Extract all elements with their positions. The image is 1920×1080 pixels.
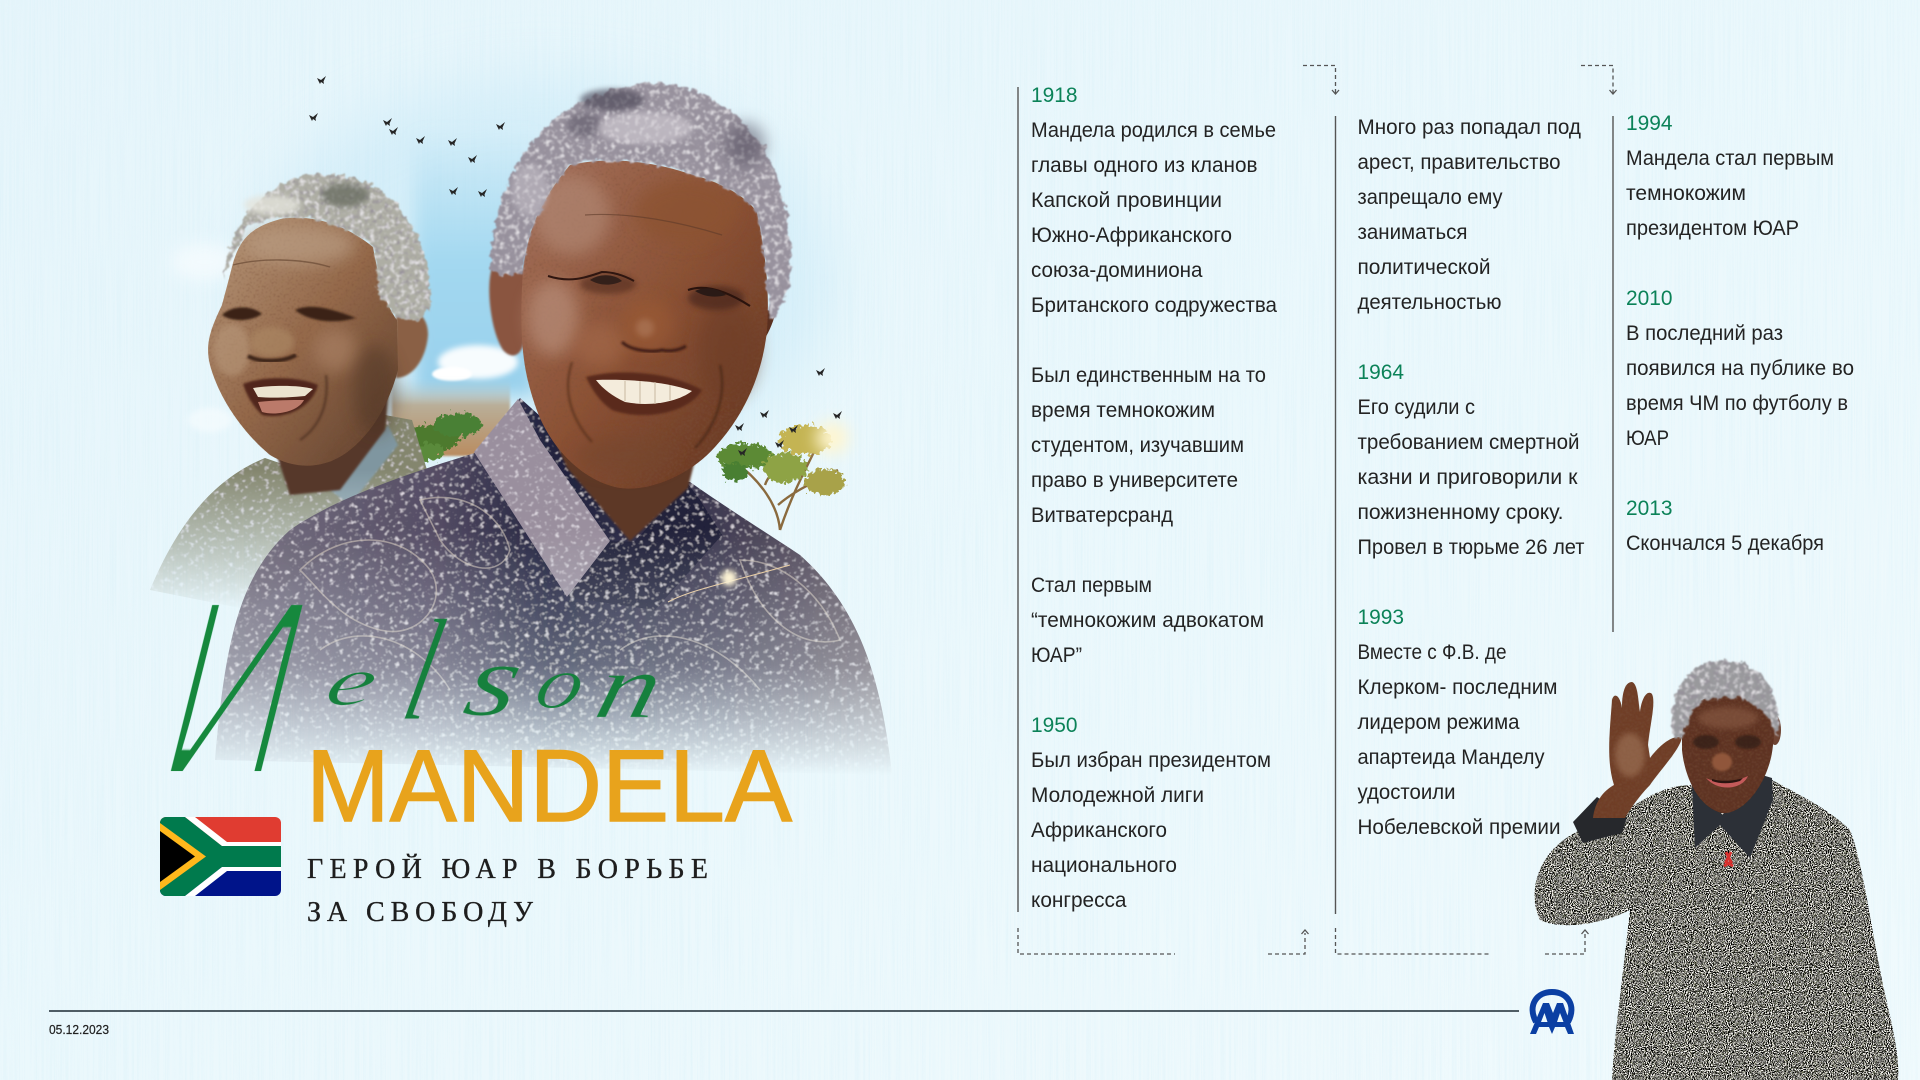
title: MANDELA: MANDELA (306, 729, 792, 843)
timeline column 1: Витватерсранд (1031, 504, 1173, 527)
sky behind portraits (171, 80, 830, 480)
timeline column 3: 2013 (1626, 497, 1672, 520)
timeline column 3: 1994 (1626, 112, 1673, 135)
subtitle: ГЕРОЙ ЮАР В БОРЬБЕ (307, 854, 708, 885)
birds flock (309, 76, 505, 197)
mouth (586, 372, 702, 415)
timeline column 1: Молодежной лиги (1031, 784, 1204, 807)
timeline column 2: арест, правительство (1358, 151, 1560, 174)
timeline column 1: Южно-Африканского (1031, 224, 1232, 247)
timeline column 1: национального (1031, 854, 1177, 877)
title: Nelson script: s (454, 622, 535, 738)
ear right (762, 310, 776, 342)
batik pattern (300, 497, 840, 690)
timeline column 2: казни и приговорили к (1358, 466, 1578, 489)
timeline column 2: Вместе с Ф.В. де (1358, 641, 1506, 664)
shirt (150, 415, 430, 610)
timeline column 2: Его судили с (1358, 396, 1475, 419)
portrait: Mandela foreground (215, 82, 892, 775)
timeline column 1: Был единственным на то (1031, 364, 1266, 387)
timeline column 1: союза-доминиона (1031, 259, 1203, 282)
title: Nelson script: l (391, 590, 457, 751)
hair (1672, 660, 1779, 738)
timeline column 2: удостоили (1358, 781, 1456, 804)
hair (490, 82, 791, 320)
timeline column 2: требованием смертной (1358, 431, 1580, 454)
eyes (548, 272, 750, 310)
portrait: waving Mandela (1535, 660, 1898, 1080)
face (521, 160, 768, 489)
ear (1769, 715, 1781, 745)
subtitle: ЗА СВОБОДУ (307, 897, 533, 928)
timeline column 2: Клерком- последним (1358, 676, 1558, 699)
title: Nelson script: o (528, 643, 594, 725)
arrow: column 2 to column 3 (1336, 66, 1616, 954)
sweater (1535, 780, 1898, 1080)
face (1682, 693, 1774, 813)
timeline column 1: Был избран президентом (1031, 749, 1271, 772)
timeline column 2: апартеида Манделу (1358, 746, 1545, 769)
timeline column 2: Много раз попадал под (1358, 116, 1581, 139)
date: 05.12.2023 (49, 1023, 109, 1037)
timeline column 1: 1950 (1031, 714, 1078, 737)
arrow: column 1 to column 2 (1018, 66, 1339, 954)
timeline column 3: время ЧМ по футболу в (1626, 392, 1848, 415)
face shading (527, 175, 758, 473)
timeline column 2: политической (1358, 256, 1490, 279)
hair (223, 174, 430, 320)
ribbon (1724, 852, 1733, 866)
timeline column 1: студентом, изучавшим (1031, 434, 1244, 457)
timeline column 3 (1626, 112, 1854, 555)
timeline column 3: президентом ЮАР (1626, 217, 1799, 240)
timeline column 2: Провел в тюрьме 26 лет (1358, 536, 1585, 559)
tree with sun glow and birds (717, 368, 848, 530)
column rules (1018, 87, 1613, 914)
timeline column 2: лидером режима (1358, 711, 1520, 734)
landscape with clouds and trees (392, 345, 518, 461)
face details (214, 225, 397, 440)
timeline column 1: Стал первым (1031, 574, 1152, 597)
timeline column 3: Мандела стал первым (1626, 147, 1834, 170)
neck (275, 375, 390, 495)
portrait: older Mandela behind (150, 174, 430, 610)
title: Nelson script: e (319, 644, 386, 721)
hair shading (244, 183, 369, 215)
ear left (489, 268, 525, 355)
timeline column 1: время темнокожим (1031, 399, 1215, 422)
timeline column 1: Мандела родился в семье (1031, 119, 1276, 142)
icon: AA logo (1530, 992, 1574, 1034)
subtitle (307, 854, 708, 928)
title: Nelson script: N (139, 550, 334, 826)
timeline column 2: 1964 (1358, 361, 1404, 384)
title: Nelson script (139, 550, 685, 826)
timeline column 3: ЮАР (1626, 427, 1669, 450)
timeline column 2: пожизненному сроку. (1358, 501, 1564, 524)
timeline column 1: главы одного из кланов (1031, 154, 1258, 177)
facial features (1693, 707, 1761, 788)
palm (1615, 733, 1645, 777)
timeline column 3: 2010 (1626, 287, 1672, 310)
timeline column 3: появился на публике во (1626, 357, 1854, 380)
timeline column 1: Британского содружества (1031, 294, 1277, 317)
timeline column 2 (1358, 116, 1585, 839)
timeline column 1: конгресса (1031, 889, 1127, 912)
icon: South African flag (160, 817, 281, 896)
timeline column 3: темнокожим (1626, 182, 1746, 205)
title: Nelson script: n (586, 636, 674, 738)
shirt with fade (215, 398, 892, 775)
timeline column 3: Скончался 5 декабря (1626, 532, 1824, 555)
timeline column 1: 1918 (1031, 84, 1078, 107)
hair shading (512, 89, 765, 216)
ear (396, 311, 428, 378)
timeline column 3: В последний раз (1626, 322, 1783, 345)
timeline column 2: запрещало ему (1358, 186, 1503, 209)
forearm and hand (1593, 682, 1682, 818)
timeline column 1: право в университете (1031, 469, 1238, 492)
timeline column 1: “темнокожим адвокатом (1031, 609, 1264, 632)
footer line (49, 1010, 1519, 1012)
nose (622, 299, 686, 351)
timeline column 2: заниматься (1358, 221, 1468, 244)
cuff (1573, 797, 1627, 843)
timeline column 1: Капской провинции (1031, 189, 1222, 212)
collar (1692, 775, 1773, 858)
timeline column 1: Африканского (1031, 819, 1167, 842)
timeline column 2: 1993 (1358, 606, 1404, 629)
neck (555, 440, 700, 541)
face (208, 218, 398, 466)
timeline column 2: деятельностью (1358, 291, 1502, 314)
timeline column 2: Нобелевской премии (1358, 816, 1560, 839)
timeline column 1 (1031, 84, 1277, 912)
timeline column 1: ЮАР” (1031, 644, 1082, 667)
